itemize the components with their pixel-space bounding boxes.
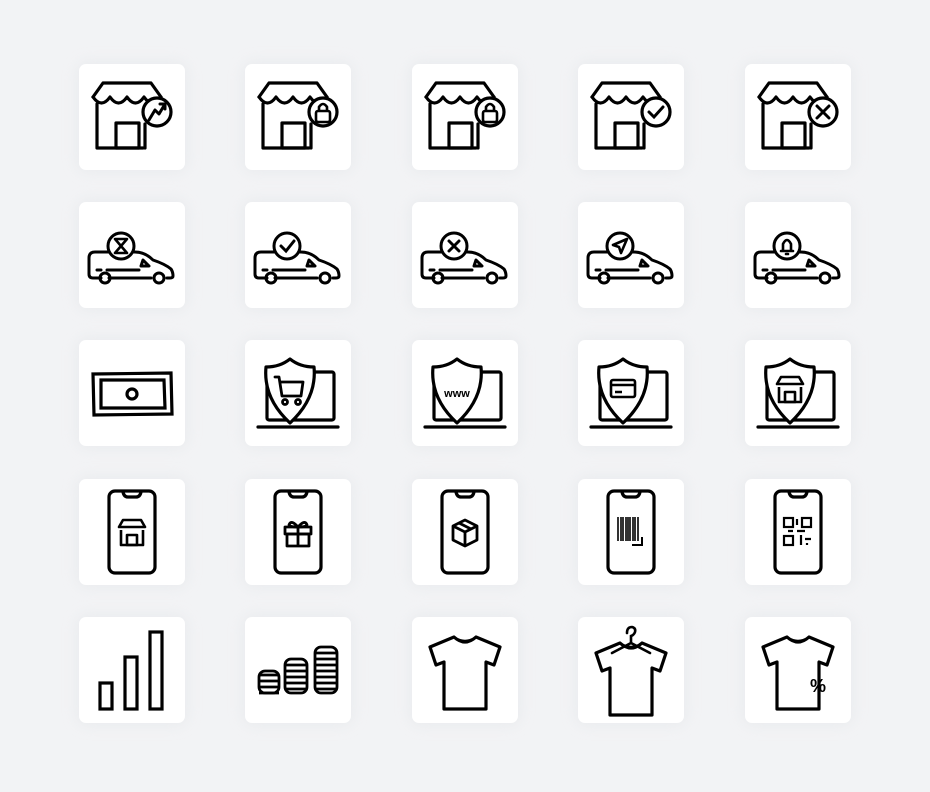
row 2: delivery vans (75, 198, 855, 312)
icon: secure website (408, 336, 522, 450)
icon: store locked (241, 60, 355, 174)
icon: t-shirt on hanger (574, 613, 688, 727)
icon: store closed (741, 60, 855, 174)
icon: phone package (408, 475, 522, 589)
icon: phone gift (241, 475, 355, 589)
icon: van delivered (241, 198, 355, 312)
icon: van tracking (574, 198, 688, 312)
row 4: mobile phones (75, 475, 855, 589)
icon: secure website: www (443, 388, 470, 400)
icon: van cancelled (408, 198, 522, 312)
icon: phone barcode (574, 475, 688, 589)
icon: t-shirt discount (741, 613, 855, 727)
icon: banknote (75, 336, 189, 450)
icon: t-shirt (408, 613, 522, 727)
icon: bar chart (75, 613, 189, 727)
row 1: store icons (75, 60, 855, 174)
icon: secure payment card (574, 336, 688, 450)
icon: coin stacks (241, 613, 355, 727)
icon: van notification (741, 198, 855, 312)
icon: store growth (75, 60, 189, 174)
row 5: stats, coins, apparel (75, 613, 855, 727)
icon: store approved (574, 60, 688, 174)
icon: secure store (741, 336, 855, 450)
icon: phone store (75, 475, 189, 589)
row 3: money and secure laptops (75, 336, 855, 450)
icon: phone qr code (741, 475, 855, 589)
icon: store locked 2 (408, 60, 522, 174)
icon: t-shirt discount: % (810, 676, 826, 696)
icon: secure shopping cart (241, 336, 355, 450)
icon: van pending (75, 198, 189, 312)
panel: icon grid (75, 60, 855, 727)
